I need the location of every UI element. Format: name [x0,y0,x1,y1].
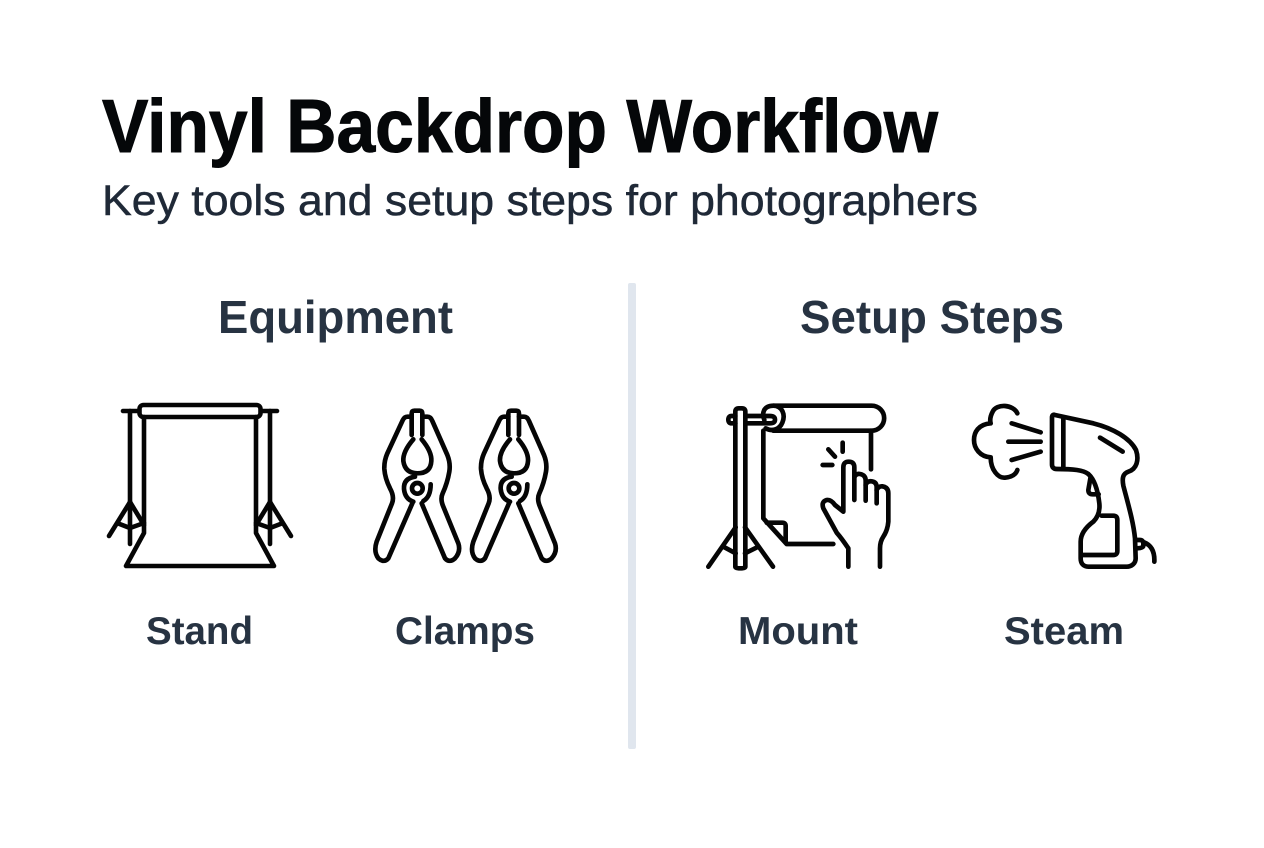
clamp: right [472,411,556,561]
title: Vinyl Backdrop Workflow [102,84,939,168]
icon: mount backdrop [708,406,888,568]
clamp: left [375,411,459,561]
icon: steamer [974,406,1154,567]
icon: clamps [375,411,556,561]
heading: Equipment: Equipment [218,291,453,343]
label: Mount: Mount [738,610,858,653]
icon: backdrop stand [109,405,291,566]
label: Stand: Stand [146,610,253,653]
heading: Setup Steps: Setup Steps [800,291,1064,343]
label: Steam: Steam [1004,610,1124,653]
center divider [628,283,636,749]
label: Clamps: Clamps [395,610,535,653]
subtitle: Key tools and setup steps for photographers [102,177,978,225]
